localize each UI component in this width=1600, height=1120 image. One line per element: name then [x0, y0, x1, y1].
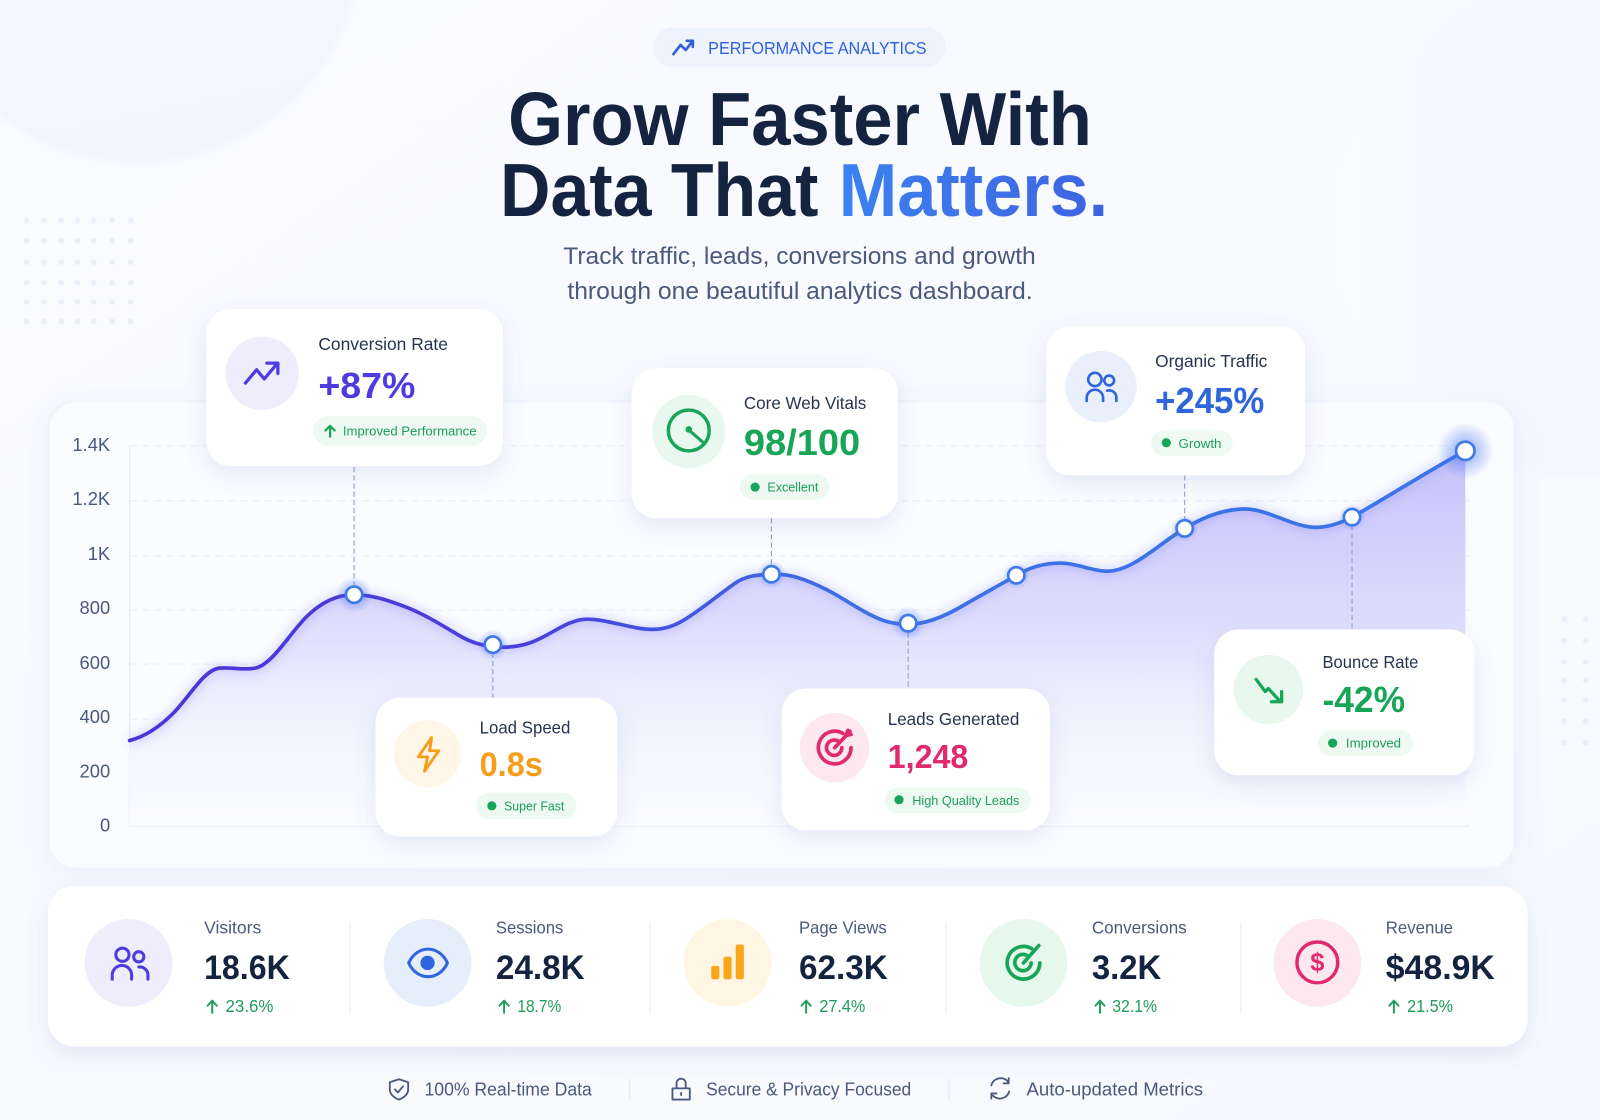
subtitle: Track traffic, leads, conversions and growth — [563, 243, 1036, 270]
stat: conversions: 32.1% — [1112, 996, 1157, 1016]
stat: revenue: $ — [1310, 949, 1324, 977]
callout: leads generated: 1,248 — [888, 739, 968, 776]
y axis labels: 1K — [88, 543, 111, 564]
eyebrow badge — [653, 28, 946, 67]
callout: load speed: Load Speed — [480, 717, 570, 737]
badge — [477, 793, 577, 819]
icon: lightning bolt — [394, 720, 461, 787]
callout: core web vitals — [632, 368, 898, 518]
stat: sessions: 24.8K — [496, 949, 585, 987]
badge: Excellent — [767, 480, 819, 495]
callout: bounce rate — [1214, 629, 1474, 775]
y axis labels: 600 — [80, 652, 110, 673]
title: Grow Faster With — [508, 77, 1092, 161]
stat: sessions: 18.7% — [517, 996, 561, 1016]
callout: bounce rate: Bounce Rate — [1322, 652, 1418, 672]
stat: revenue: 21.5% — [1407, 996, 1453, 1016]
stat: page views: 27.4% — [819, 996, 865, 1016]
callout: conversion rate: Conversion Rate — [318, 334, 448, 354]
callout: conversion rate — [206, 309, 503, 466]
stat: page views — [684, 917, 888, 1016]
badge: Super Fast — [504, 798, 565, 813]
callout: organic traffic: +245% — [1155, 381, 1264, 421]
footer: trust items: Secure & Privacy Focused — [706, 1079, 911, 1100]
badge — [313, 416, 487, 446]
footer: trust items: 100% Real-time Data — [424, 1079, 593, 1100]
connector lines — [354, 467, 1352, 698]
icon: trending up — [673, 41, 693, 54]
data points — [336, 422, 1494, 660]
icon: trending up — [226, 337, 299, 410]
y axis labels: 400 — [80, 706, 110, 727]
stat: revenue: $48.9K — [1386, 949, 1495, 987]
y axis labels: 800 — [80, 597, 110, 618]
y axis labels: 200 — [80, 760, 110, 781]
callout: leads generated — [782, 689, 1050, 830]
icon: users — [1065, 351, 1137, 422]
icon: lock — [672, 1079, 690, 1100]
callout: organic traffic: Organic Traffic — [1155, 351, 1267, 371]
subtitle: through one beautiful analytics dashboard. — [567, 278, 1033, 305]
stat: conversions: Conversions — [1092, 917, 1187, 937]
icon: refresh — [991, 1078, 1009, 1099]
stat: visitors — [85, 917, 290, 1016]
stat: visitors: 18.6K — [204, 949, 290, 987]
badge: High Quality Leads — [912, 793, 1020, 808]
badge — [1151, 430, 1233, 456]
icon: trending down — [1234, 655, 1303, 724]
stat: page views: 62.3K — [799, 949, 888, 987]
icon: gauge — [652, 395, 726, 468]
badge: Growth — [1179, 436, 1221, 451]
y axis labels: 1.2K — [72, 488, 111, 509]
callout: organic traffic — [1046, 326, 1305, 475]
stat: conversions: 3.2K — [1092, 949, 1161, 987]
panel: stats bar — [48, 886, 1528, 1047]
callout: core web vitals: 98/100 — [744, 423, 860, 463]
stat: sessions — [384, 917, 585, 1016]
callout: conversion rate: +87% — [318, 366, 415, 406]
icon: target — [800, 713, 869, 782]
stat: revenue: Revenue — [1386, 917, 1453, 937]
badge — [1318, 730, 1413, 756]
badge — [740, 474, 830, 500]
callout: bounce rate: -42% — [1322, 680, 1405, 720]
stat: page views: Page Views — [799, 917, 887, 937]
stat: visitors: 23.6% — [226, 996, 273, 1016]
badge — [885, 787, 1031, 813]
title: Data That — [500, 148, 818, 232]
callout: leads generated: Leads Generated — [888, 709, 1019, 729]
footer: trust items — [390, 1078, 1203, 1100]
footer: trust items: Auto-updated Metrics — [1027, 1079, 1203, 1100]
stat: revenue — [1273, 917, 1495, 1016]
stat: visitors: Visitors — [204, 917, 262, 937]
panel: line chart — [48, 401, 1515, 869]
title: Matters. — [839, 148, 1108, 232]
y axis labels — [72, 434, 111, 835]
callout: core web vitals: Core Web Vitals — [744, 393, 866, 413]
area under curve — [130, 451, 1465, 826]
y axis labels: 0 — [100, 814, 110, 835]
badge: Improved Performance — [343, 424, 477, 439]
subtitle — [563, 243, 1036, 305]
callout: load speed: 0.8s — [480, 746, 543, 784]
stat: sessions: Sessions — [496, 917, 564, 937]
stat: conversions — [980, 917, 1187, 1016]
title — [500, 77, 1108, 232]
y axis labels: 1.4K — [72, 434, 111, 455]
eyebrow badge: PERFORMANCE ANALYTICS — [708, 38, 927, 58]
callout: load speed — [376, 698, 617, 836]
line series — [130, 451, 1465, 741]
icon: shield — [390, 1079, 408, 1100]
badge: Improved — [1346, 736, 1401, 751]
